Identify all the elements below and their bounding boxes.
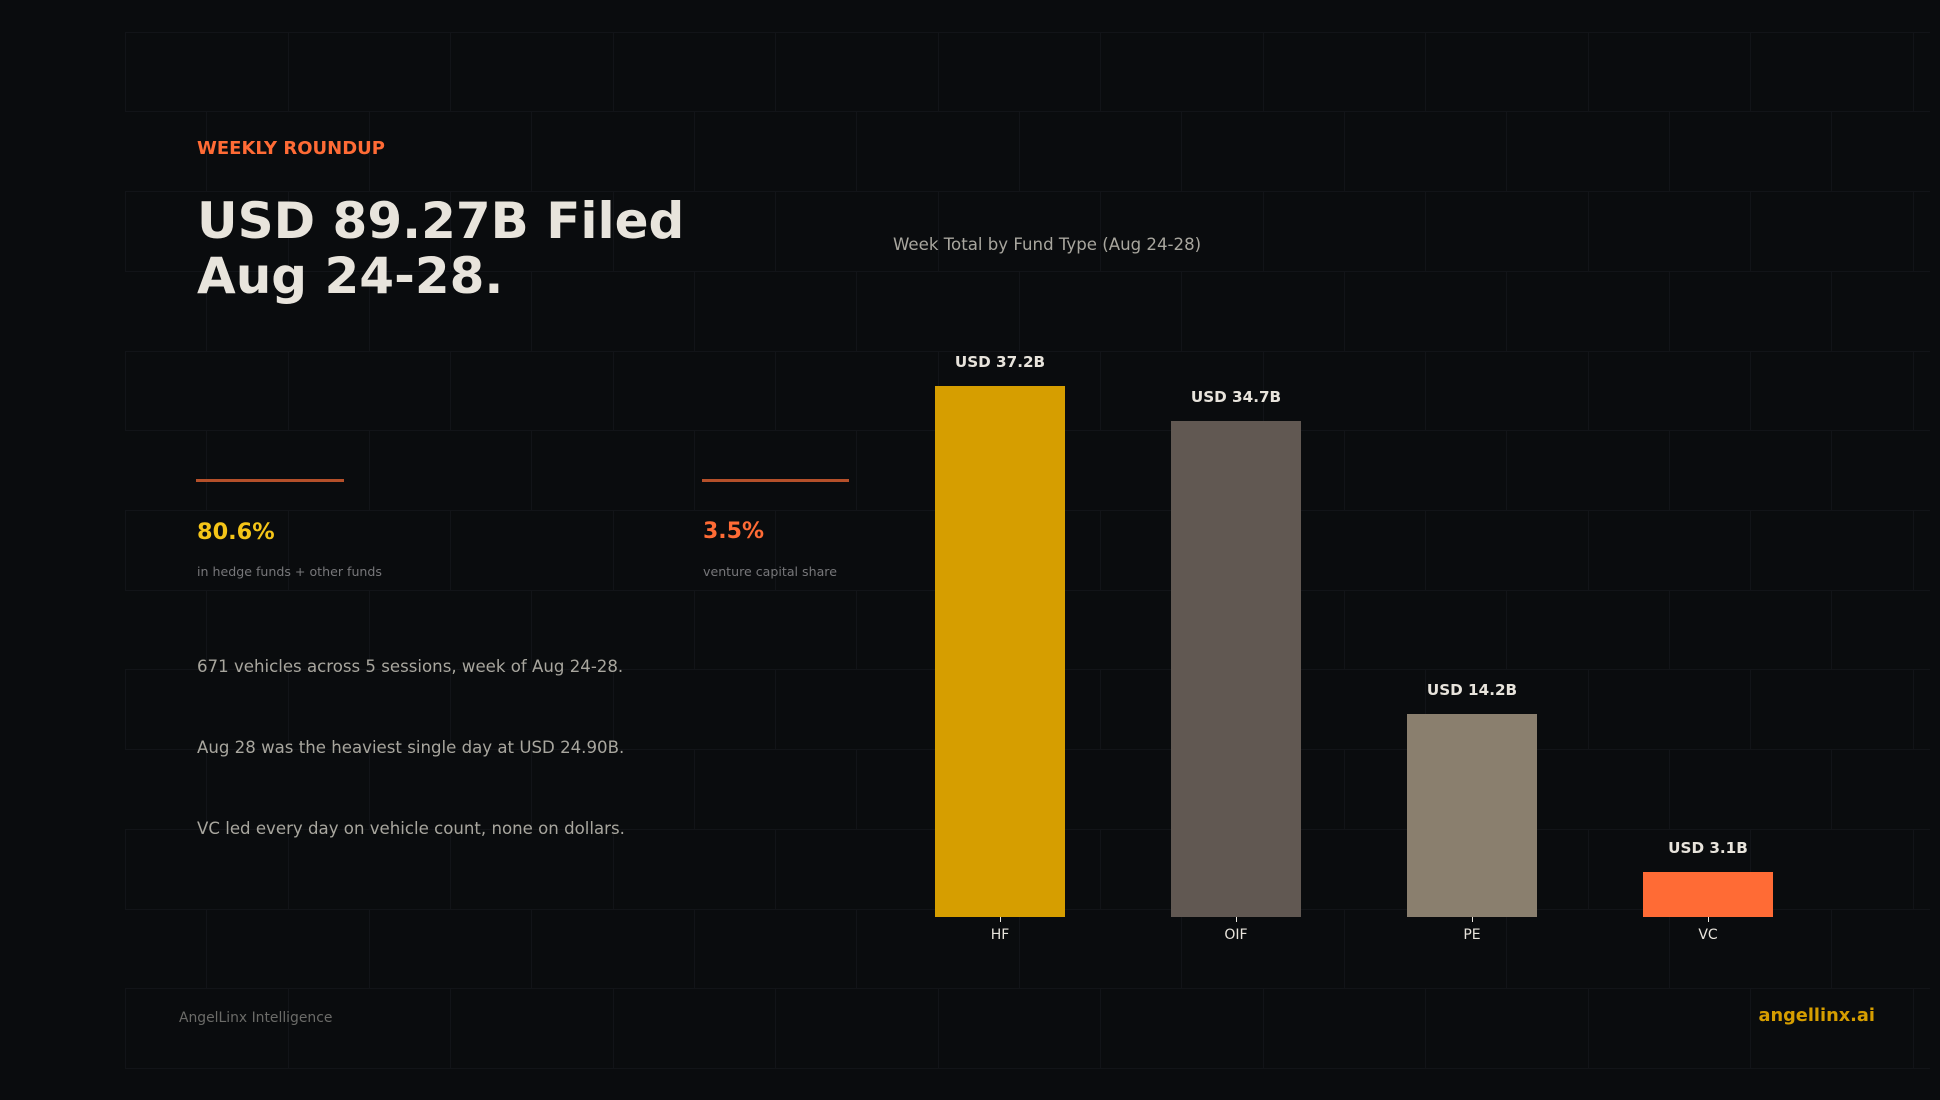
- stat: hedge funds + other funds: [196, 479, 382, 579]
- bar: VC: USD 3.1B: [1668, 839, 1748, 857]
- body line 2: Aug 28 was the heaviest single day at USD 24.90B.: [197, 738, 624, 757]
- stat caption: in hedge funds + other funds: [197, 564, 382, 579]
- body text block: [197, 657, 625, 838]
- body line 3: VC led every day on vehicle count, none on dollars.: [197, 819, 625, 838]
- bar: VC: [1643, 839, 1773, 943]
- bar: PE: PE: [1463, 927, 1481, 943]
- bar: HF: [935, 353, 1065, 943]
- chart title: Week Total by Fund Type (Aug 24-28): [893, 235, 1201, 254]
- bar: VC: VC: [1698, 927, 1718, 943]
- stat: venture capital share: [702, 479, 849, 579]
- title: [197, 192, 684, 305]
- eyebrow: weekly roundup: WEEKLY ROUNDUP: [197, 138, 385, 159]
- footer source: AngelLinx Intelligence: [179, 1010, 332, 1026]
- bar: OIF: OIF: [1224, 927, 1248, 943]
- bar: HF: USD 37.2B: [955, 353, 1045, 371]
- title: USD 89.27B Filed: [197, 192, 684, 250]
- stat value: 3.5%: [703, 519, 764, 544]
- accent rule: [702, 479, 849, 482]
- bar: OIF: [1171, 388, 1301, 943]
- bar: HF: HF: [991, 927, 1009, 943]
- bar: PE: [1407, 681, 1537, 943]
- bar: OIF: USD 34.7B: [1191, 388, 1281, 406]
- stat value: 80.6%: [197, 519, 275, 545]
- footer brand: angellinx.ai: [1758, 1006, 1875, 1026]
- body line 1: 671 vehicles across 5 sessions, week of Aug 24-28.: [197, 657, 623, 676]
- accent rule: [196, 479, 344, 482]
- title: Aug 24-28.: [197, 247, 503, 305]
- stat caption: venture capital share: [703, 564, 837, 579]
- bar: PE: USD 14.2B: [1427, 681, 1517, 699]
